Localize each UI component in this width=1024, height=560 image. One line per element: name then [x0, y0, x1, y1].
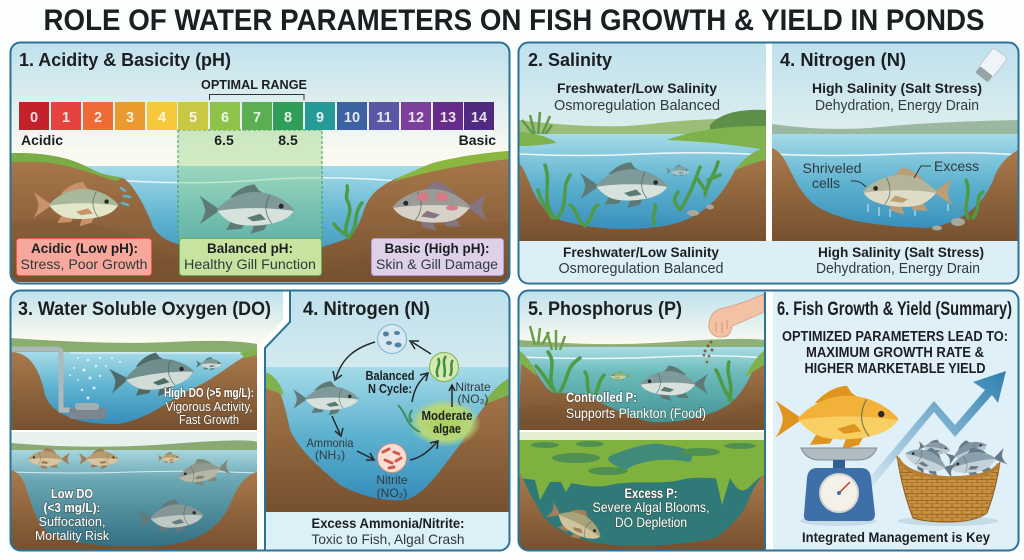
label: balanced N cycle [366, 369, 414, 396]
heading: 4. Nitrogen (N) [303, 299, 430, 320]
pH scale: 12 [408, 110, 424, 126]
icon: stress droplets [121, 188, 130, 205]
fish: sick [543, 496, 608, 549]
text: high salinity lower: High Salinity (Salt Stress) [818, 244, 984, 260]
optimal zone [178, 130, 322, 240]
text: integrated management: Integrated Management is Key [802, 529, 990, 545]
text: controlled P: Supports Plankton (Food) [566, 405, 706, 421]
glow: moderate algae [409, 399, 481, 447]
icon: hand sprinkling feed [703, 294, 764, 363]
scale labels: Basic [459, 132, 496, 148]
pH scale: 1 [62, 110, 70, 126]
fish: balanced [200, 184, 294, 234]
panel: 2 salinity [518, 42, 1018, 284]
summary text [782, 329, 1008, 377]
label: moderate algae: Moderate [422, 409, 473, 423]
text: high DO: Vigorous Activity, [166, 399, 252, 414]
label: shriveled cells: cells [812, 175, 840, 191]
fish: nitrogen cycle [293, 381, 359, 416]
heading: 3. Water Soluble Oxygen (DO) [18, 299, 271, 320]
panel: 3 dissolved oxygen [10, 290, 510, 550]
icon: nitrite bacteria circle [378, 444, 406, 472]
nitrogen sub-panel background [257, 291, 509, 550]
label: shriveled cells: Shriveled [802, 160, 862, 176]
optimal range label [201, 78, 307, 100]
arrow: growth trend [866, 371, 1006, 487]
callout: basic: Basic (High pH): [384, 240, 490, 256]
label: nitrite [376, 473, 408, 500]
pH scale: 13 [440, 110, 456, 126]
pH scale: 3 [126, 110, 134, 126]
text: low DO [35, 486, 109, 543]
callout: acidic: Acidic (Low pH): [31, 240, 138, 256]
label: nitrate: Nitrate [455, 380, 491, 394]
text: freshwater upper: Freshwater/Low Salinity [557, 80, 717, 96]
text: excess ammonia: Excess Ammonia/Nitrite: [312, 515, 464, 531]
icon: bacteria top circle [378, 324, 406, 354]
pH scale: 9 [316, 110, 324, 126]
scene: controlled P [519, 291, 765, 430]
label: moderate algae: algae [433, 422, 461, 436]
seaweed [334, 186, 362, 238]
label: excess: Excess [934, 158, 979, 174]
scene: high DO [11, 338, 257, 430]
icon: basket of fish [897, 434, 1008, 526]
callout: basic: Skin & Gill Damage [376, 256, 498, 272]
label: nitrite: Nitrite [376, 473, 408, 487]
label: nitrate [455, 380, 491, 406]
icon: weighing scale [800, 448, 877, 526]
pH scale [19, 102, 494, 130]
summary text: MAXIMUM GROWTH RATE & [806, 345, 984, 361]
label: nitrate: (NO₃) [458, 392, 488, 406]
fish: active large [108, 348, 196, 402]
text: high DO: High DO (>5 mg/L): [164, 385, 254, 400]
text: high salinity lower: Dehydration, Energy Drain [816, 261, 980, 277]
pH scale: 11 [376, 110, 392, 126]
fish: acidic stressed [34, 182, 118, 226]
text: controlled P: Controlled P: [566, 390, 637, 405]
panel: 5 phosphorus [519, 291, 765, 550]
scene: low DO [11, 430, 257, 550]
text: high salinity upper [812, 80, 982, 114]
heading: 5. Phosphorus (P) [528, 299, 682, 320]
text: freshwater upper [554, 80, 720, 114]
arrows: nitrogen cycle [332, 341, 455, 460]
fish: small [666, 165, 690, 177]
icon: salt shaker [974, 47, 1008, 83]
scale labels: Acidic [21, 132, 63, 148]
pH scale: 0 [30, 110, 38, 126]
fish: golden [776, 386, 898, 450]
callout: balanced [180, 238, 322, 276]
callout: acidic: Stress, Poor Growth [20, 256, 148, 272]
callout: basic [372, 238, 504, 276]
algae strands [398, 405, 420, 432]
text: excess ammonia [312, 515, 464, 547]
pH scale: 7 [253, 110, 261, 126]
text: high DO [164, 385, 254, 427]
heading: 4. Nitrogen (N) [780, 50, 906, 70]
text: high salinity upper: Dehydration, Energy Drain [815, 98, 979, 114]
icon: algae circle [430, 352, 458, 382]
text: high salinity upper: High Salinity (Salt Stress) [812, 80, 982, 96]
text: excess P: Excess P: [624, 486, 678, 501]
pH scale: 6 [221, 110, 229, 126]
heading: 1. Acidity & Basicity (pH) [19, 50, 231, 70]
pH scale: 2 [94, 110, 102, 126]
text: freshwater lower: Freshwater/Low Salinity [563, 244, 719, 260]
scene: excess P [519, 430, 765, 550]
text: freshwater lower: Osmoregulation Balanced [558, 261, 724, 277]
callout: balanced: Balanced pH: [207, 240, 293, 256]
text: low DO: Mortality Risk [35, 528, 109, 543]
pH scale: 4 [158, 110, 166, 126]
fish: active small [196, 357, 222, 370]
bubbles [69, 357, 121, 400]
label: ammonia [306, 436, 354, 462]
text: low DO: Low DO [51, 486, 93, 501]
scene: high salinity pond [772, 120, 1018, 241]
panel: 1 acidity and basicity [10, 42, 510, 284]
scale labels: 6.5 [214, 132, 234, 148]
text: excess P: Severe Algal Blooms, [592, 499, 710, 515]
fish: healthy [580, 162, 668, 208]
pH scale: 10 [344, 110, 360, 126]
label: ammonia: Ammonia [306, 436, 354, 450]
heading: 2. Salinity [528, 50, 612, 70]
text: excess P [592, 486, 710, 530]
text: controlled P [566, 390, 706, 421]
pH scale: 5 [189, 110, 197, 126]
fish: basic damaged [392, 181, 488, 231]
text: low DO: (<3 mg/L): [44, 500, 100, 515]
callout: balanced: Healthy Gill Function [184, 256, 316, 272]
scale labels [21, 132, 496, 148]
text: excess ammonia: Toxic to Fish, Algal Crash [312, 531, 464, 547]
fish: gasping group [28, 448, 232, 535]
text: excess P: DO Depletion [615, 514, 687, 530]
scene: freshwater pond [519, 110, 766, 241]
optimal range label: OPTIMAL RANGE [201, 78, 307, 92]
summary text: HIGHER MARKETABLE YIELD [804, 361, 986, 377]
callout: acidic [16, 238, 152, 276]
label: balanced N cycle: N Cycle: [368, 382, 412, 396]
label: balanced N cycle: Balanced [366, 369, 414, 383]
label: moderate algae [422, 409, 473, 436]
label: nitrite: (NO₂) [377, 486, 407, 500]
label: excess [914, 158, 979, 178]
text: freshwater upper: Osmoregulation Balanced [554, 98, 720, 114]
label: ammonia: (NH₃) [315, 448, 345, 462]
scale labels: 8.5 [278, 132, 298, 148]
fish: dehydrated [863, 168, 953, 217]
text: high salinity lower [816, 244, 984, 277]
icon: aerator pump [12, 349, 106, 419]
label: shriveled cells [802, 160, 866, 191]
panel: 6 fish growth and yield [518, 290, 1018, 550]
pH scale: 14 [471, 110, 487, 126]
text: low DO: Suffocation, [38, 514, 106, 529]
text: freshwater lower [558, 244, 724, 277]
text: high DO: Fast Growth [179, 412, 239, 427]
pH scale: 8 [284, 110, 292, 126]
